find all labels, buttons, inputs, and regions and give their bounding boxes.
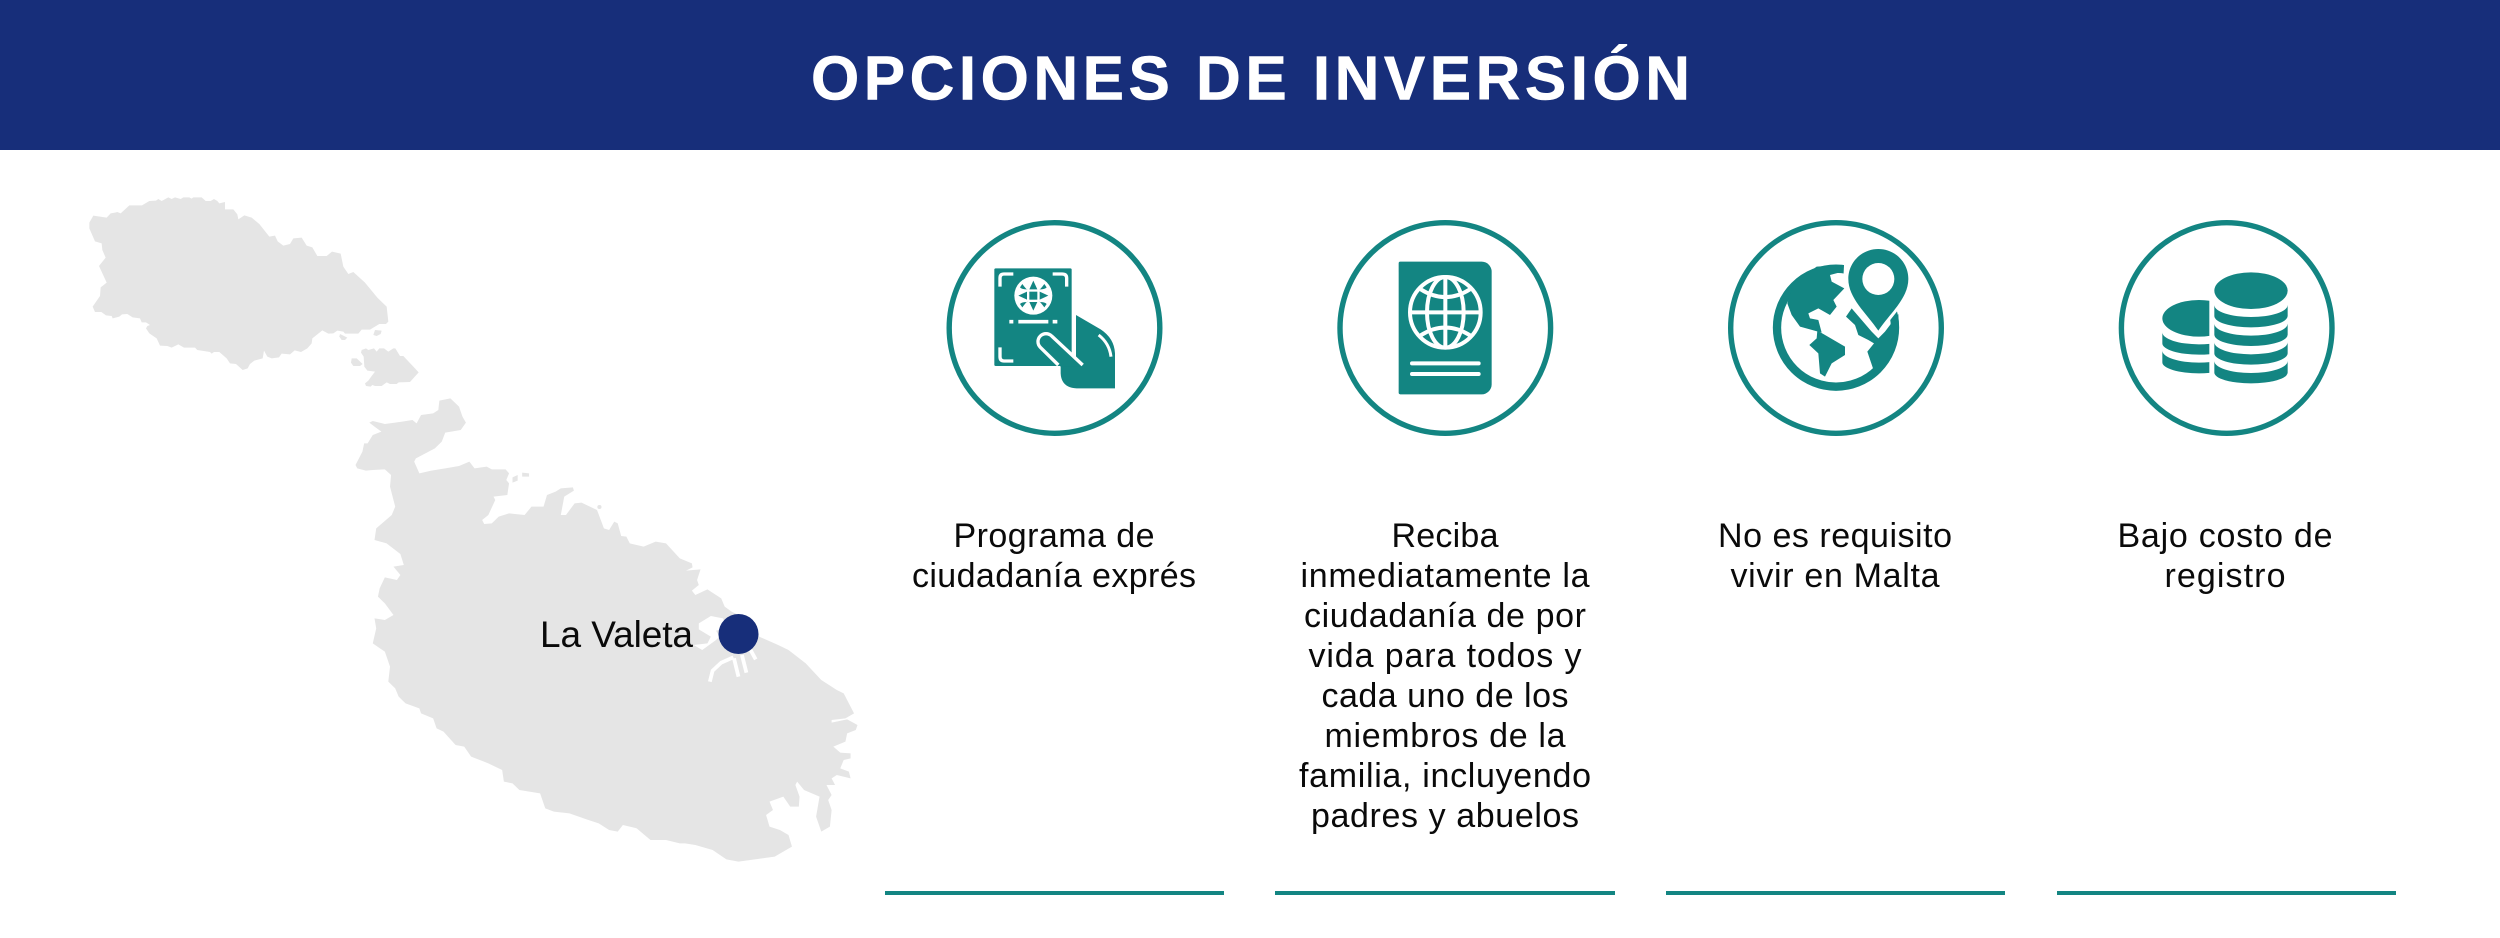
text: immediate lifetime citizenship: ciudadanía de por [1304,597,1586,635]
text: immediate lifetime citizenship: inmediatamente la [1300,557,1590,595]
text: low registration cost: registro [2164,557,2286,595]
text: express citizenship program [912,517,1196,595]
location marker: La Valeta: La Valeta [540,614,693,655]
text: no residency requirement: vivir en Malta [1730,557,1940,595]
map of Malta [89,197,858,862]
text: immediate lifetime citizenship: familia, incluyendo [1299,757,1591,795]
text: no residency requirement [1718,517,1952,595]
column 1: express citizenship [885,223,1224,895]
text: immediate lifetime citizenship: vida para todos y [1308,637,1582,675]
title banner [0,0,2500,150]
text: low registration cost [2118,517,2332,595]
island: Gozo [89,197,419,387]
text: immediate lifetime citizenship: padres y abuelos [1311,797,1579,835]
title banner: OPCIONES DE INVERSIÓN [811,44,1690,114]
text: immediate lifetime citizenship [1299,517,1591,835]
text: express citizenship program: Programa de [954,517,1154,555]
icon: globe with location pin [1731,223,1941,433]
text: immediate lifetime citizenship: Reciba [1392,517,1499,555]
text: no residency requirement: No es requisito [1718,517,1952,555]
column 3: no residency [1666,223,2005,895]
text: low registration cost: Bajo costo de [2118,517,2332,555]
island: Malta [356,398,858,862]
column 2: immediate citizenship [1275,223,1615,895]
text: immediate lifetime citizenship: miembros de la [1324,717,1566,755]
text: express citizenship program: ciudadanía exprés [912,557,1196,595]
column 4: low registration cost [2057,223,2396,895]
icon: hand touching passport scan [949,223,1160,433]
text: immediate lifetime citizenship: cada uno de los [1322,677,1568,715]
icon: passport [1340,223,1551,433]
icon: coin stacks [2121,223,2332,433]
